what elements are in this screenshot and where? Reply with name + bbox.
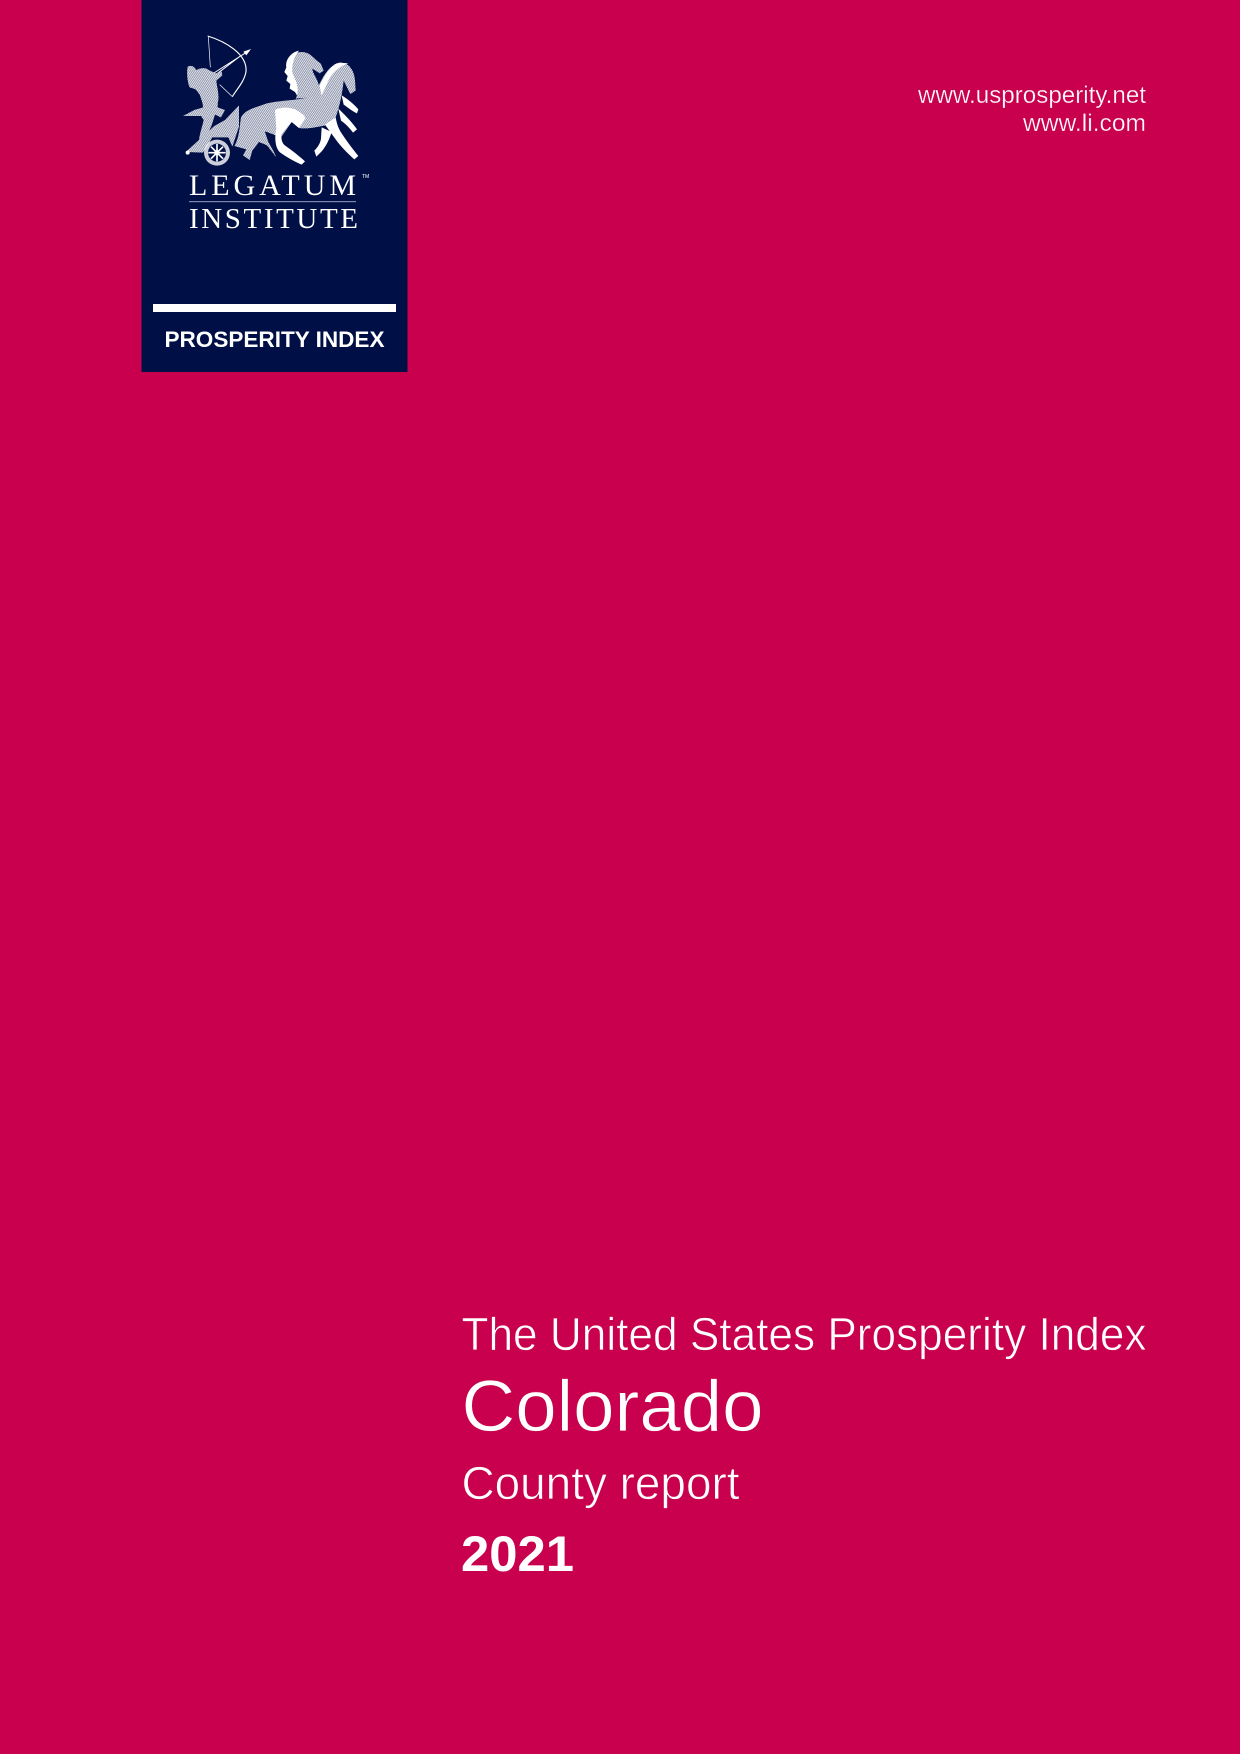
logotype: Legatum Institute [189,169,369,235]
heading: state name: Colorado [462,1367,764,1447]
bow and arrow [208,36,251,97]
year: 2021 [461,1526,574,1582]
subheading: report type: County report [462,1457,740,1509]
near horse [234,63,358,165]
legs [275,108,358,165]
website links: www.li.com [1022,110,1146,137]
far horse [284,51,358,133]
panel: logo block [142,0,408,372]
heading: index name: The United States Prosperity Index [462,1308,1146,1360]
logotype: Legatum Institute: INSTITUTE [189,203,358,235]
archer [183,66,225,140]
white rule [153,304,396,312]
logotype: Legatum Institute: TM [362,174,369,180]
label: Prosperity Index: PROSPERITY INDEX [164,327,384,352]
website links [917,82,1146,137]
chariot body [186,105,239,153]
website links: www.usprosperity.net [917,82,1146,109]
chariot wheel [186,140,230,166]
logotype: Legatum Institute: LEGATUM [189,169,356,202]
icon: archer in horse-drawn chariot [183,36,358,166]
title block [461,1308,1146,1582]
